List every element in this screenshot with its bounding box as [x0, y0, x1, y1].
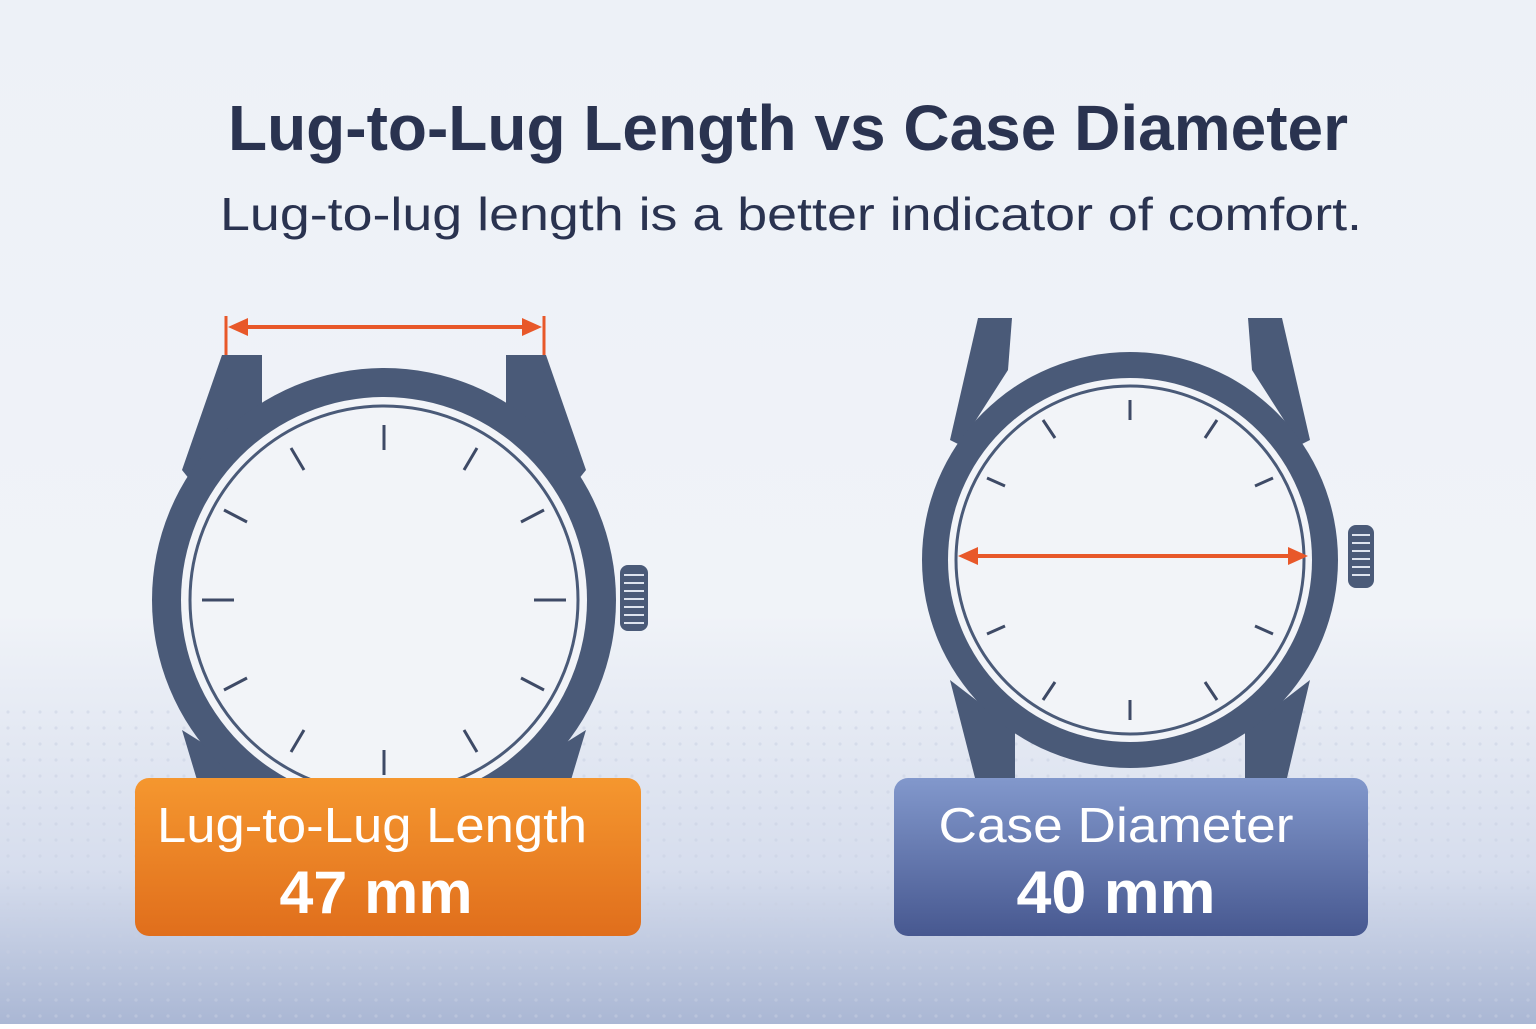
label box: lug-to-lug: [135, 778, 641, 936]
arrow: case diameter: [958, 547, 1308, 565]
arrow: lug-to-lug: [226, 316, 544, 355]
label box: case diameter: Case Diameter: [938, 799, 1294, 853]
label box: case diameter: 40 mm: [1016, 859, 1216, 926]
left watch: [152, 355, 648, 832]
right watch: [922, 318, 1374, 778]
label box: lug-to-lug: 47 mm: [280, 859, 472, 926]
label box: lug-to-lug: Lug-to-Lug Length: [157, 799, 587, 853]
label box: case diameter: [894, 778, 1368, 936]
title: Lug-to-Lug Length vs Case Diameter: [228, 92, 1348, 164]
subtitle: Lug-to-lug length is a better indicator of comfort.: [220, 188, 1362, 240]
